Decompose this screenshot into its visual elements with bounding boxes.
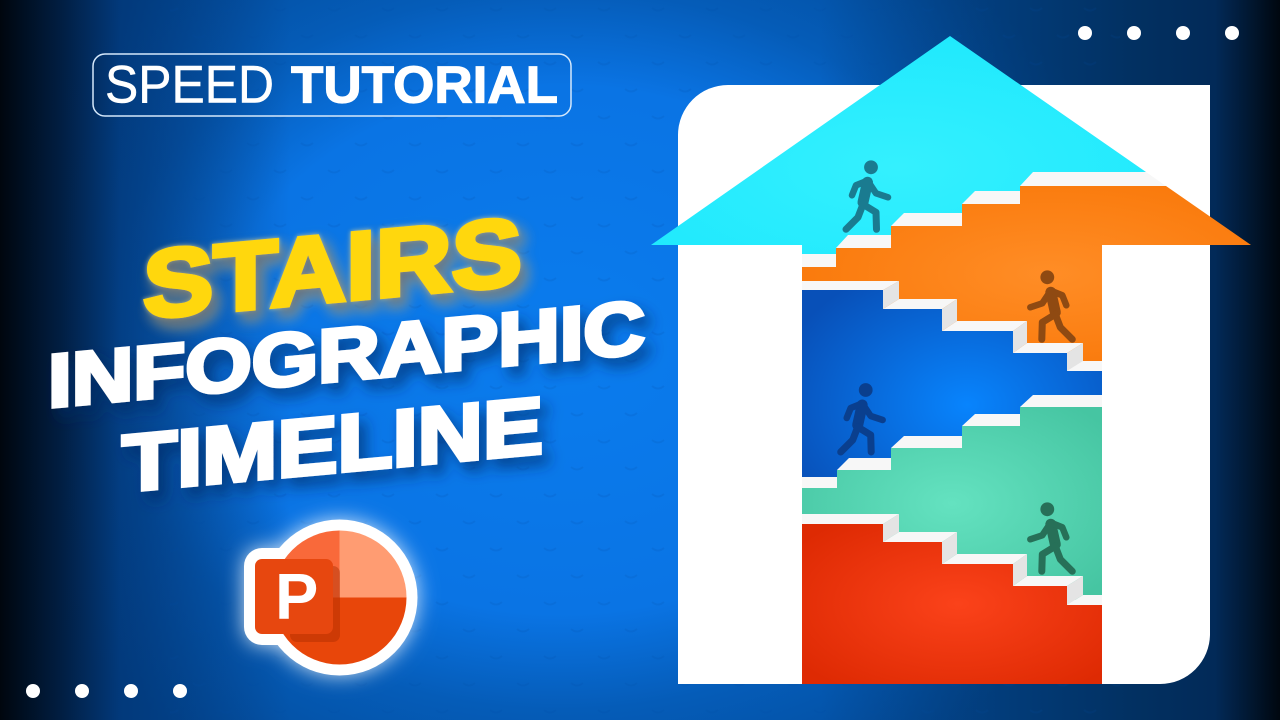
title: timeline: TIMELINE <box>122 381 543 510</box>
green staircase <box>802 395 1102 600</box>
badge: speed tutorial: TUTORIAL <box>291 56 558 114</box>
badge: speed tutorial: SPEED <box>105 56 274 114</box>
icon: powerpoint logo: P <box>275 560 318 633</box>
dots: top right <box>1078 26 1239 40</box>
icon: walker on green <box>1030 502 1072 571</box>
white house panel <box>678 85 1210 684</box>
dots: bottom left <box>26 684 187 698</box>
house staircase illustration <box>651 36 1251 684</box>
orange staircase <box>802 172 1251 361</box>
red staircase <box>802 514 1102 684</box>
background pattern <box>170 0 1120 720</box>
icon: walker on orange <box>1030 270 1072 339</box>
badge: speed tutorial <box>93 54 571 116</box>
icon: walker on roof <box>846 160 888 229</box>
blue staircase <box>802 281 1102 520</box>
title: infographic: INFOGRAPHIC <box>48 285 645 423</box>
icon: powerpoint logo <box>244 520 418 676</box>
title: stairs: STAIRS <box>143 198 522 339</box>
icon: walker on blue <box>841 383 883 452</box>
cyan roof <box>651 36 1146 254</box>
